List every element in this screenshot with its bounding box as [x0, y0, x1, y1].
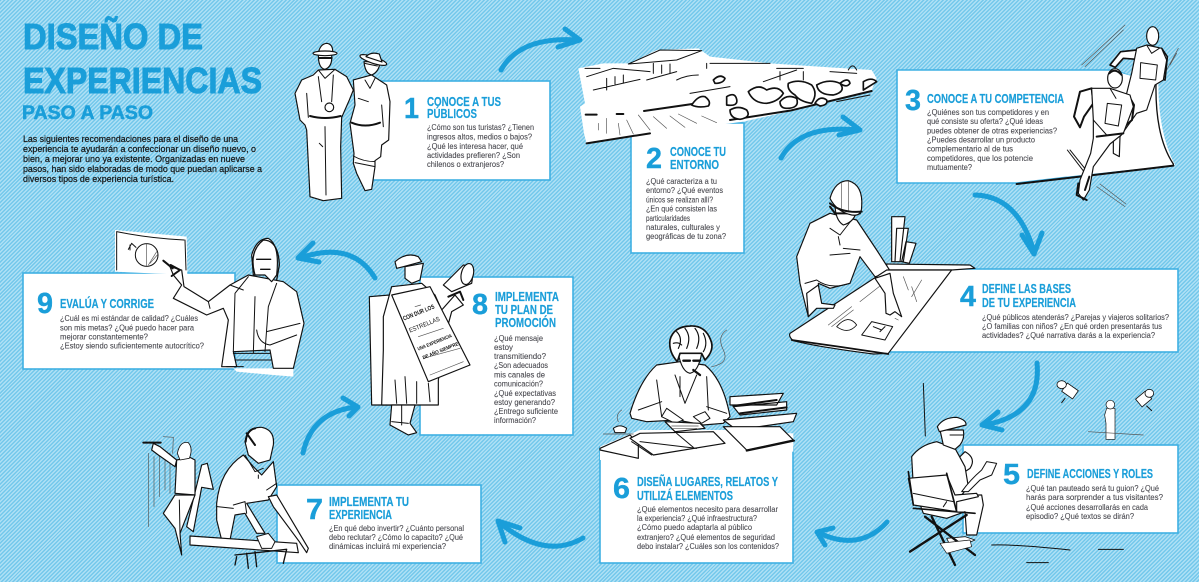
icon: small actor figure — [1088, 400, 1143, 439]
text: step 8 questions: ¿Qué mensaje — [494, 333, 543, 343]
arrow: step 7 to 8 — [303, 398, 358, 453]
text: step 1 questions: actividades prefieren? ¿Son — [427, 150, 520, 160]
text: step 2 questions: entorno? ¿Qué eventos — [646, 185, 724, 195]
heading: step 9: EVALÚA Y CORRIGE — [60, 296, 154, 311]
panel: step 7 — [277, 485, 481, 563]
text: step 6 questions: extranjero? ¿Qué elementos de seguridad — [637, 532, 775, 542]
text: step 9 questions: ¿Cuál es mi estándar de calidad? ¿Cuáles — [60, 313, 199, 323]
illustration: film director in chair — [908, 383, 1123, 565]
text: step 8 questions — [494, 333, 558, 425]
heading: step 1 — [427, 94, 501, 121]
arrow: step 3 to 4 — [975, 195, 1042, 254]
heading: step 7 — [329, 494, 409, 522]
text: step 9 questions: mejorar constantemente? — [60, 332, 148, 342]
text: step 4 questions: ¿O familias con niños? ¿En qué orden presentarás tus — [982, 321, 1163, 331]
panel: step 5 — [963, 445, 1178, 533]
illustration: runners — [1017, 25, 1178, 207]
intro text: diversos tipos de experiencia turística. — [23, 174, 174, 184]
text: step 2 questions — [646, 176, 726, 241]
icon: spotlight left — [1057, 381, 1078, 403]
arrow: step 6 to 7 — [498, 521, 583, 546]
illustration: sandwich-board promoter with megaphone: UNA EXPERIENCIA — [417, 333, 453, 353]
panel: step 3 — [897, 70, 1173, 183]
heading: step 8: PROMOCIÓN — [495, 315, 556, 330]
text: step 1 questions — [427, 122, 534, 169]
text: step 8 questions: comunicación? — [494, 378, 543, 388]
text: step 6 questions: ¿Cómo puedo adaptarla al público — [637, 522, 752, 532]
text: step 7 questions: dinámicas incluirá mi experiencia? — [329, 541, 446, 551]
text: step 4 questions: actividades? ¿Qué narrativa darás a la experiencia? — [982, 330, 1155, 340]
text: step 2 questions: únicos se realizan allí? — [646, 194, 713, 204]
text: step 2 questions: ¿En qué consisten las — [646, 204, 718, 214]
text: step 6 questions: la experiencia? ¿Qué infraestructura? — [637, 513, 757, 523]
illustration: sandwich-board promoter with megaphone: DE AÑO SIEMPRE — [421, 340, 460, 361]
illustration: sandwich-board promoter with megaphone: CON DUR LOS — [402, 304, 436, 323]
panel: step 7: 7 — [306, 494, 323, 526]
text: step 3 questions: ¿Quiénes son tus competidores y en — [927, 107, 1049, 117]
panel: step 2: 2 — [646, 143, 662, 175]
text: step 8 questions: ¿Entrego suficiente — [494, 406, 558, 416]
heading: step 2: ENTORNO — [670, 157, 719, 172]
panel: step 9: 9 — [37, 288, 53, 320]
panel: step 4: 4 — [960, 281, 976, 313]
illustration: writer at desk — [600, 326, 797, 460]
text: step 2 questions: geográficas de tu zona? — [646, 231, 726, 241]
text: step 2 questions: ¿Qué caracteriza a tu — [646, 176, 717, 186]
text: step 5 questions: ¿Qué acciones desarrollarás en cada — [1026, 502, 1148, 512]
heading: step 8: TU PLAN DE — [495, 302, 553, 317]
heading: step 2 — [670, 144, 726, 172]
panel: step 5: 5 — [1003, 459, 1020, 491]
panel: step 8 — [420, 277, 573, 435]
intro text: experiencia te ayudarán a confeccionar un diseño nuevo, o — [23, 144, 256, 154]
text: step 3 questions: qué consiste su oferta? ¿Qué ideas — [927, 116, 1044, 126]
arrow: step 4 to 5 — [982, 363, 1037, 430]
heading: step 4: DE TU EXPERIENCIA — [982, 295, 1076, 310]
text: step 6 questions — [637, 504, 779, 551]
heading: step 4: DEFINE LAS BASES — [982, 281, 1071, 296]
panel: step 4 — [890, 269, 1178, 352]
text: step 6 questions: ¿Qué elementos necesito para desarrollar — [637, 504, 778, 514]
illustration: sandwich-board promoter with megaphone — [369, 255, 476, 435]
text: step 8 questions: información? — [494, 415, 536, 425]
text: step 2 questions: particularidades — [646, 213, 690, 223]
text: step 6 questions: debo instalar? ¿Cuáles son los contenidos? — [637, 541, 779, 551]
text: step 4 questions — [982, 312, 1169, 340]
illustration: landscape — [578, 48, 877, 144]
intro text: Las siguientes recomendaciones para el diseño de una — [23, 134, 239, 144]
text: step 3 questions: ¿Puedes desarrollar un producto — [927, 134, 1035, 144]
arrow: step 8 to 9 — [298, 243, 375, 278]
text: step 5 questions: ¿Qué tan pauteado será tu guion? ¿Qué — [1026, 483, 1159, 493]
text: step 5 questions: harás para sorprender a tus visitantes? — [1026, 492, 1163, 502]
heading: step 6: UTILIZÁ ELEMENTOS — [637, 488, 733, 503]
text: step 1 questions: ¿Qué les interesa hacer, qué — [427, 141, 523, 151]
arrow: step 2 to 3 — [781, 117, 860, 158]
text: step 1 questions: ingresos altos, medios o bajos? — [427, 132, 532, 142]
text: step 8 questions: transmitiendo? — [494, 351, 546, 361]
intro text — [23, 134, 263, 184]
heading: step 6 — [637, 474, 778, 503]
panel: step 9 — [23, 273, 235, 369]
panel: step 8: 8 — [472, 289, 488, 321]
heading: step 8 — [495, 289, 559, 330]
text: step 3 questions — [927, 107, 1057, 172]
heading: step 3: CONOCE A TU COMPETENCIA — [927, 91, 1064, 106]
title block: EXPERIENCIAS — [23, 60, 262, 101]
arrow: step 5 to 6 — [817, 522, 887, 545]
text: step 3 questions: puedes obtener de otras experiencias? — [927, 126, 1057, 136]
text: step 9 questions — [60, 313, 204, 350]
heading: step 8: IMPLEMENTA — [495, 289, 559, 304]
text: step 2 questions: naturales, culturales y — [646, 222, 721, 232]
text: step 8 questions: ¿Son adecuados — [494, 360, 549, 370]
text: step 7 questions: ¿En qué debo invertir? ¿Cuánto personal — [329, 523, 464, 533]
panel: step 2 — [631, 123, 744, 253]
illustration: woman presenting at board — [115, 230, 304, 377]
panel: step 6: 6 — [613, 473, 630, 505]
illustration: engineer with plans — [790, 181, 975, 354]
text: step 3 questions: competidores, que los potencie — [927, 153, 1033, 163]
arrow: step 1 to 2 — [501, 29, 580, 70]
heading: step 7: IMPLEMENTA TU — [329, 494, 409, 509]
intro text: bien, a mejorar uno ya existente. Organizadas en nueve — [23, 154, 245, 164]
title block: PASO A PASO — [22, 102, 153, 124]
text: step 3 questions: mutuamente? — [927, 162, 972, 172]
title block: DISEÑO DE — [23, 15, 203, 57]
panel: step 1: 1 — [404, 93, 419, 125]
illustration: tourist couple — [295, 43, 390, 201]
text: step 1 questions: ¿Cómo son tus turistas? ¿Tienen — [427, 122, 534, 132]
heading: step 1: CONOCE A TUS — [427, 94, 501, 109]
text: step 3 questions: complementario al de tus — [927, 144, 1014, 154]
panel: step 1 — [373, 81, 550, 180]
text: step 8 questions: estoy generando? — [494, 397, 555, 407]
heading: step 4 — [982, 281, 1076, 310]
illustration: sandwich-board promoter with megaphone: ESTRELLAS — [408, 316, 441, 335]
text: step 8 questions: mis canales de — [494, 370, 545, 380]
intro text: pasos, han sido elaboradas de modo que puedan aplicarse a — [23, 164, 263, 174]
text: step 5 questions — [1026, 483, 1163, 521]
text: step 8 questions: ¿Qué expectativas — [494, 388, 557, 398]
text: step 4 questions: ¿Qué públicos atenderás? ¿Parejas y viajeros solitarios? — [982, 312, 1169, 322]
heading: step 1: PÚBLICOS — [427, 106, 477, 121]
text: step 9 questions: son mis metas? ¿Qué puedo hacer para — [60, 322, 194, 332]
text: step 7 questions: debo reclutar? ¿Cómo lo capacito? ¿Qué — [329, 532, 463, 542]
text: step 5 questions: episodio? ¿Qué textos se dirán? — [1026, 511, 1134, 521]
heading: step 2: CONOCE TU — [670, 144, 726, 159]
text: step 8 questions: estoy — [494, 342, 514, 352]
heading: step 7: EXPERIENCIA — [329, 507, 392, 522]
heading: step 6: DISEÑA LUGARES, RELATOS Y — [637, 474, 778, 489]
title block — [22, 15, 262, 124]
text: step 9 questions: ¿Estoy siendo suficientemente autocrítico? — [60, 340, 204, 350]
icon: spotlight right — [1136, 389, 1154, 411]
panel: step 6 — [600, 447, 793, 563]
panel: step 3: 3 — [905, 85, 921, 117]
illustration: carpenter and helper on ladder — [143, 427, 308, 568]
text: step 7 questions — [329, 523, 464, 551]
text: step 1 questions: chilenos o extranjeros? — [427, 159, 504, 169]
